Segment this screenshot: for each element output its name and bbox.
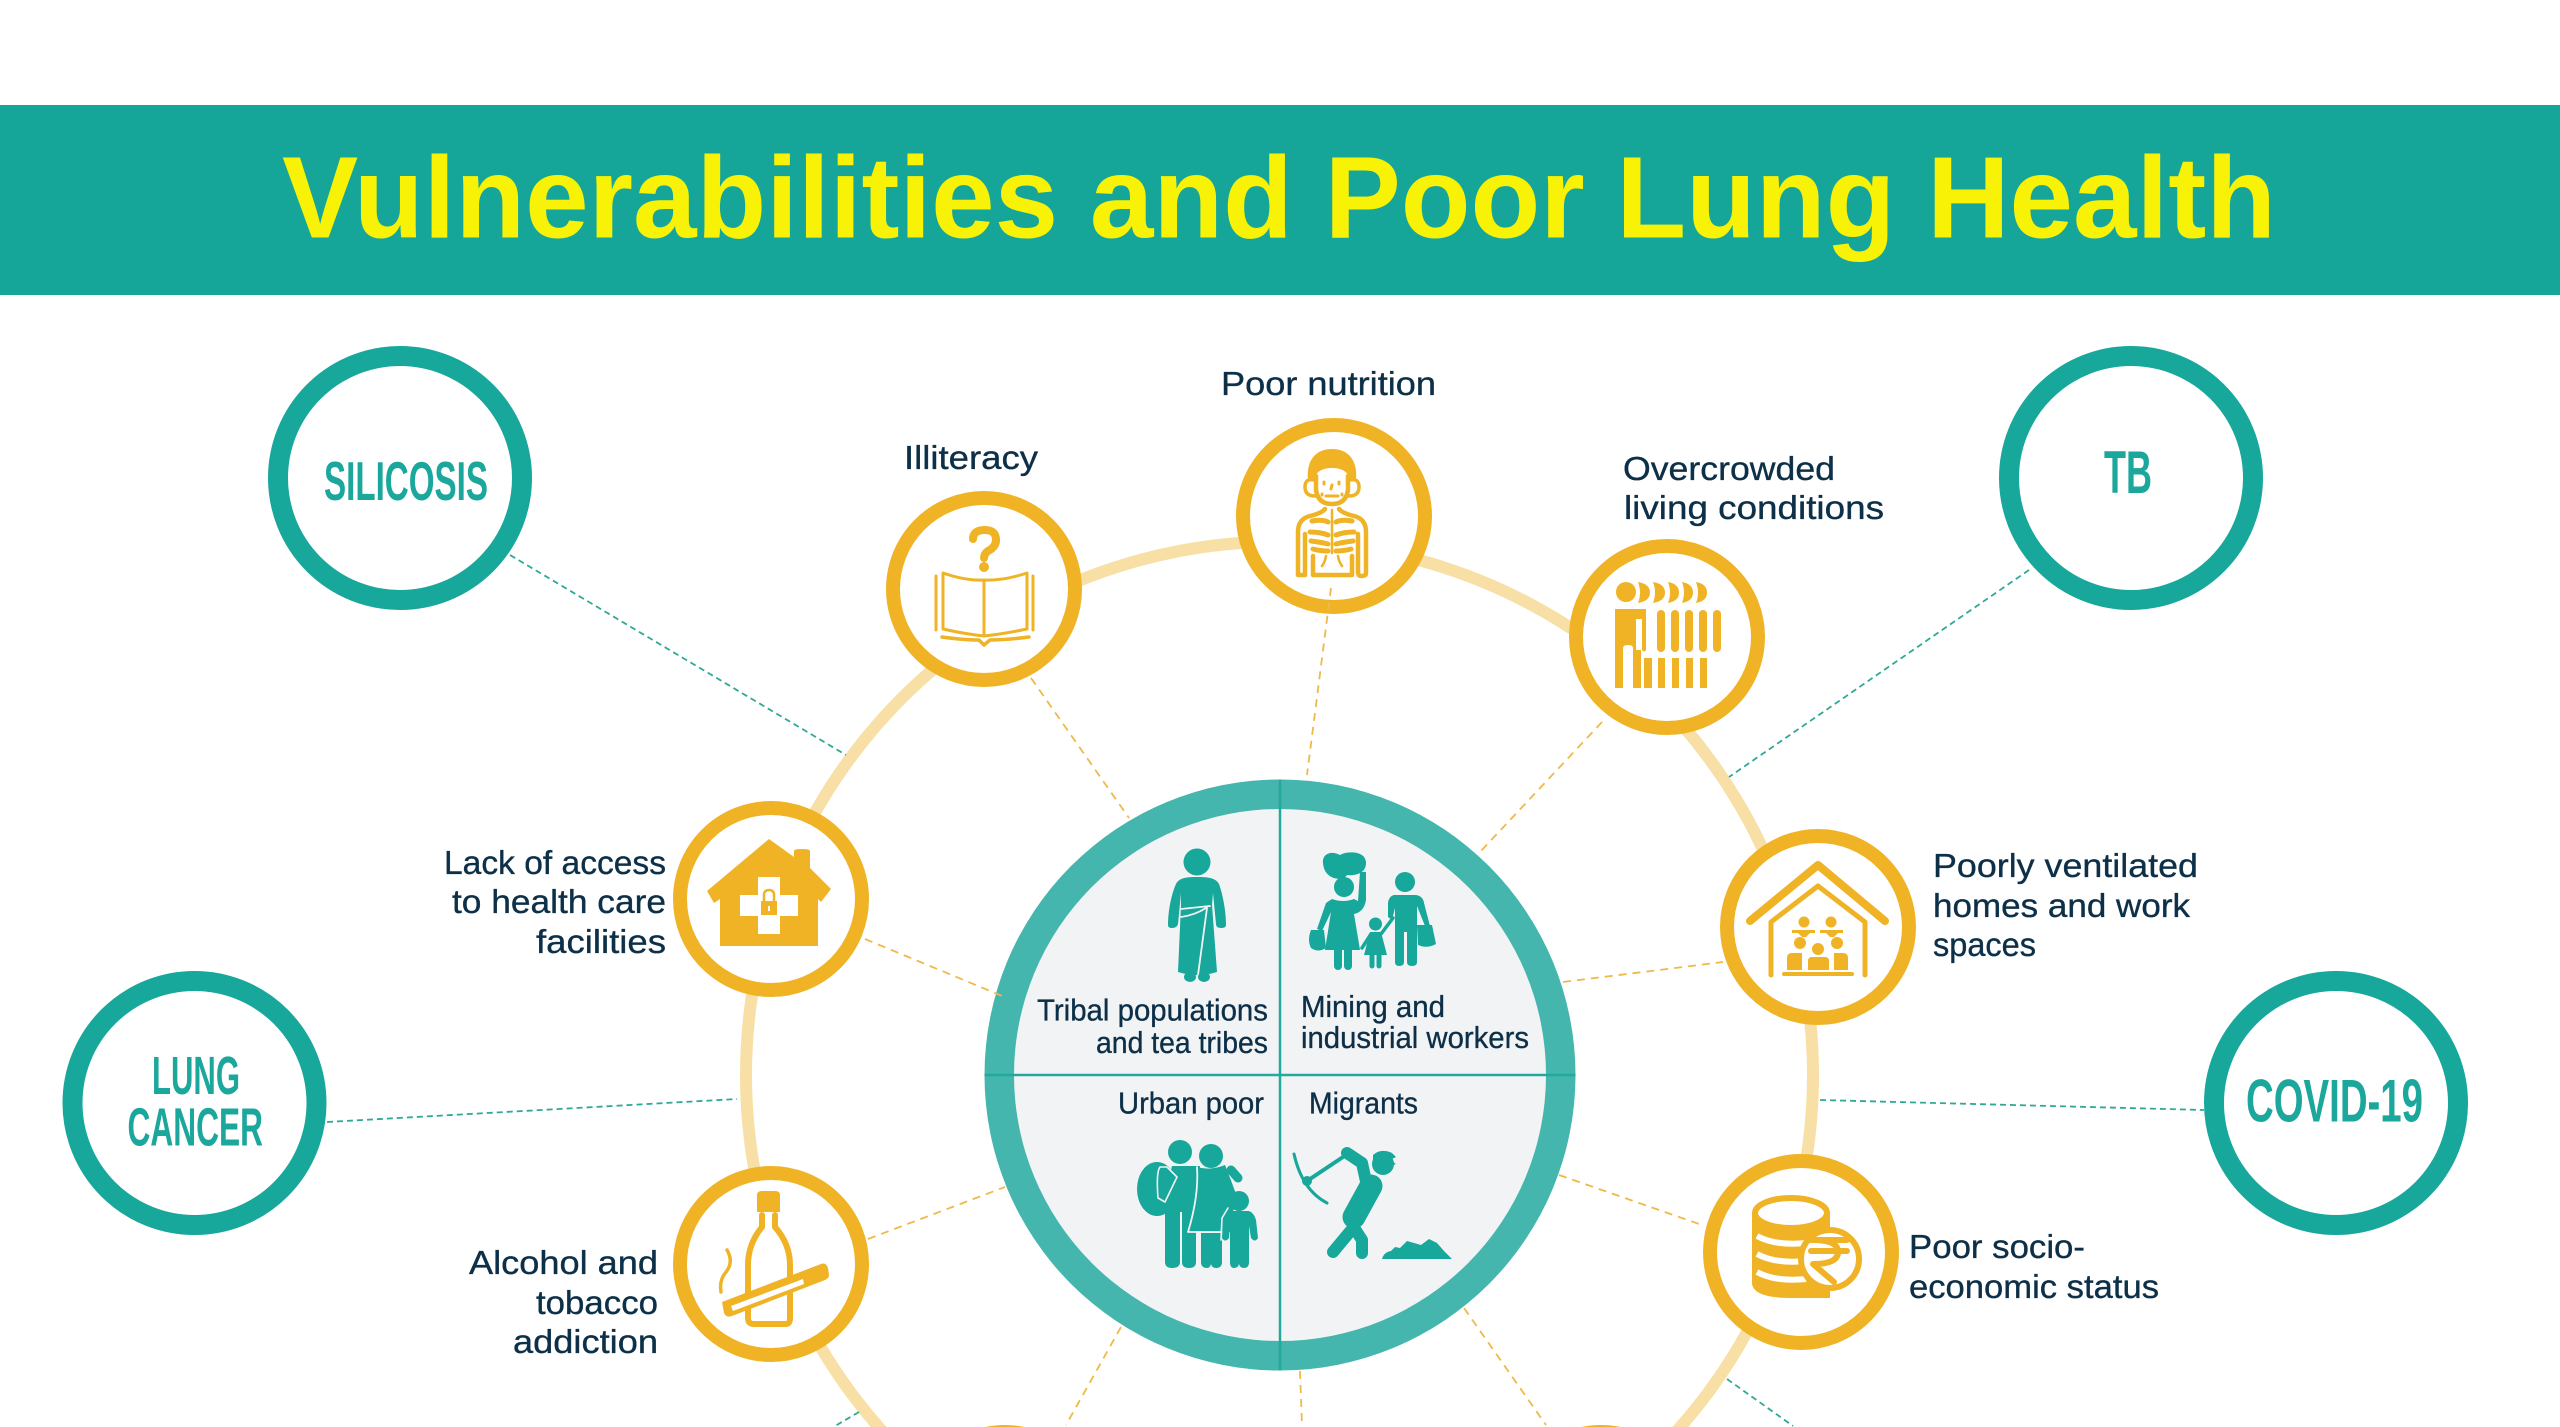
icon: coin stack and rupee: [1752, 1198, 1859, 1298]
quadrant: migrants: [1294, 1086, 1452, 1259]
label: migrants: Migrants: [1309, 1086, 1418, 1120]
title banner: [0, 105, 2560, 295]
disease: silicosis: [278, 356, 522, 600]
label: poor socio-economic status: Poor socio-: [1909, 1228, 2085, 1265]
disease: lung cancer: CANCER: [128, 1098, 263, 1158]
label: alcohol and tobacco addiction: Alcohol and: [469, 1244, 658, 1281]
quadrant: tribal populations: and tea tribes: [1096, 1025, 1268, 1060]
icon: open book with question mark: [936, 530, 1033, 645]
quadrant: urban poor: [1118, 1086, 1264, 1268]
factor: lack of access to health care: to health care: [452, 883, 666, 920]
label: overcrowded living conditions: Overcrowded: [1623, 450, 1835, 487]
disease: lung cancer: [72, 981, 316, 1225]
icon: malnourished body: [1298, 449, 1366, 576]
label: lack of access: Lack of access: [444, 844, 666, 881]
factor: overcrowded living conditions: [1576, 450, 1884, 728]
disease: silicosis: SILICOSIS: [324, 450, 488, 512]
label: illiteracy: Illiteracy: [904, 439, 1039, 476]
icon: family with bags: [1309, 852, 1436, 966]
factor: alcohol and tobacco addiction: [469, 1173, 862, 1360]
connectors: factors to central circle: [865, 588, 1723, 1425]
central population circle: [984, 780, 1576, 1370]
factor: poorly ventilated homes: spaces: [1933, 926, 2036, 963]
factor circle: bottom right (cropped): [1581, 1425, 1621, 1427]
label: mining and industrial workers: Mining and: [1301, 989, 1445, 1024]
quadrant: mining and industrial workers: [1301, 852, 1529, 1055]
label: poorly ventilated homes: Poorly ventilated: [1933, 847, 2198, 884]
factor: poor socio-economic status: economic status: [1909, 1268, 2159, 1305]
icon: crowded house: [1750, 865, 1885, 976]
factor: lack of access to health care: facilities: [536, 923, 666, 960]
outer vulnerability ring: [740, 535, 1819, 1427]
label: poor nutrition: Poor nutrition: [1221, 365, 1436, 402]
factor: poorly ventilated homes: homes and work: [1933, 887, 2191, 924]
factor: poor nutrition: [1221, 365, 1436, 607]
disease: lung cancer: LUNG: [152, 1046, 240, 1106]
quadrant: mining and industrial workers: industrial workers: [1301, 1020, 1529, 1055]
factor: alcohol and tobacco addiction: addiction: [513, 1323, 658, 1360]
factor circle: bottom left (cropped): [985, 1425, 1025, 1427]
disease: TB: [2009, 356, 2253, 600]
disease: COVID-19: [2214, 981, 2458, 1225]
label: urban poor: Urban poor: [1118, 1086, 1264, 1120]
factor: alcohol and tobacco addiction: tobacco: [536, 1284, 658, 1321]
icon: clinic house with lock: [707, 839, 831, 946]
disease: TB: TB: [2104, 439, 2152, 506]
title: Vulnerabilities and Poor Lung Health: [282, 132, 2276, 262]
factor: lack of access to health care: [444, 808, 862, 990]
factor: overcrowded living conditions: living conditions: [1624, 489, 1884, 526]
factor: poorly ventilated homes: [1727, 836, 2198, 1018]
icon: miner with pickaxe: [1294, 1151, 1452, 1259]
icon: tribal person: [1168, 848, 1226, 982]
connectors: diseases to ring: [327, 555, 2204, 1426]
icon: bottle and cigarette: [721, 1191, 829, 1324]
label: tribal populations: Tribal populations: [1037, 992, 1268, 1028]
factor: poor socio-economic status: [1710, 1161, 2159, 1343]
factor: illiteracy: [893, 439, 1075, 680]
disease: COVID-19: COVID-19: [2246, 1068, 2423, 1134]
icon: crowd of people: [1615, 582, 1717, 688]
quadrant: tribal populations: [1037, 848, 1268, 1060]
icon: migrant family with sack: [1137, 1140, 1258, 1268]
